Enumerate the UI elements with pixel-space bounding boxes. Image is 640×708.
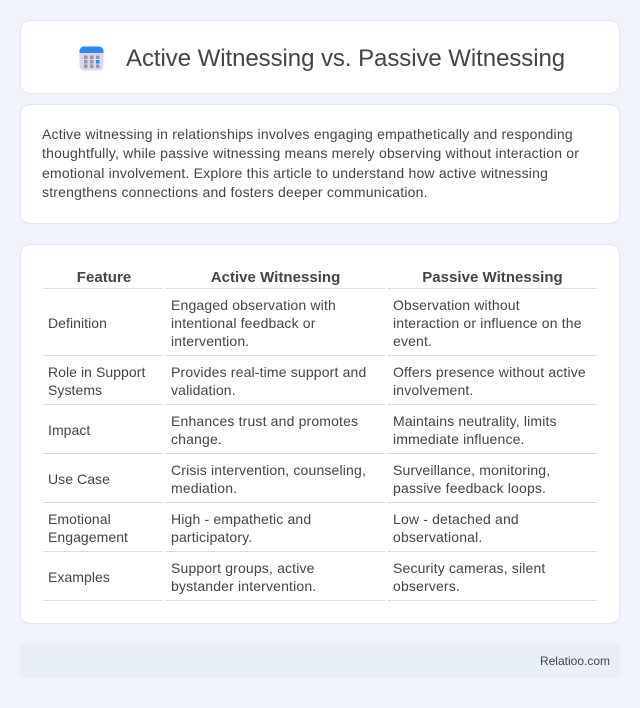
text: Observation without [393,297,520,313]
text: observational. [393,529,482,545]
row: Impact: Impact [48,422,90,438]
text: Provides real-time support and [171,364,366,380]
text: immediate influence. [393,431,525,447]
text: Crisis intervention, counseling, [171,462,366,478]
row: Emotional Engagement [48,511,128,545]
text: Security cameras, silent [393,560,545,576]
row: Role in Support Systems: Role in Support [48,364,145,380]
panel: introduction [20,104,620,224]
intro text: thoughtfully, while passive witnessing means merely observing without interaction or [42,145,579,161]
intro text [42,126,579,200]
text: Support groups, active [171,560,315,576]
text: Low - detached and [393,511,519,527]
table header: Passive Witnessing: Passive Witnessing [422,269,563,286]
text: High - empathetic and [171,511,311,527]
title: Active Witnessing vs. Passive Witnessing [126,45,565,72]
row: Role in Support Systems: Systems [48,382,102,398]
text: validation. [171,382,236,398]
row: Use Case: Use Case [48,471,110,487]
text: mediation. [171,480,237,496]
text: intervention. [171,333,249,349]
text: Engaged observation with [171,297,336,313]
panel: comparison table [20,244,620,624]
text: observers. [393,578,460,594]
footer text: Relatioo.com [540,654,610,668]
row: Definition: Definition [48,315,107,331]
text: Enhances trust and promotes [171,413,358,429]
text: passive feedback loops. [393,480,546,496]
intro text: Active witnessing in relationships involves engaging empathetically and responding [42,126,573,142]
row: Emotional Engagement: Engagement [48,529,128,545]
text: Maintains neutrality, limits [393,413,557,429]
row: Emotional Engagement: Emotional [48,511,111,527]
intro text: strengthens connections and fosters deeper communication. [42,184,428,200]
text: bystander intervention. [171,578,316,594]
intro text: emotional involvement. Explore this article to understand how active witnessing [42,165,548,181]
table header: Active Witnessing: Active Witnessing [211,269,340,286]
text: Offers presence without active [393,364,586,380]
footer bar [20,644,620,678]
text: interaction or influence on the [393,315,582,331]
text: event. [393,333,432,349]
row: Role in Support Systems [48,364,146,398]
row: Examples: Examples [48,569,110,585]
text: participatory. [171,529,252,545]
text: change. [171,431,222,447]
table header: Feature: Feature [77,269,131,286]
text: involvement. [393,382,474,398]
text: Surveillance, monitoring, [393,462,550,478]
text: intentional feedback or [171,315,316,331]
icon: calendar [80,46,104,70]
panel: title card [20,20,620,94]
